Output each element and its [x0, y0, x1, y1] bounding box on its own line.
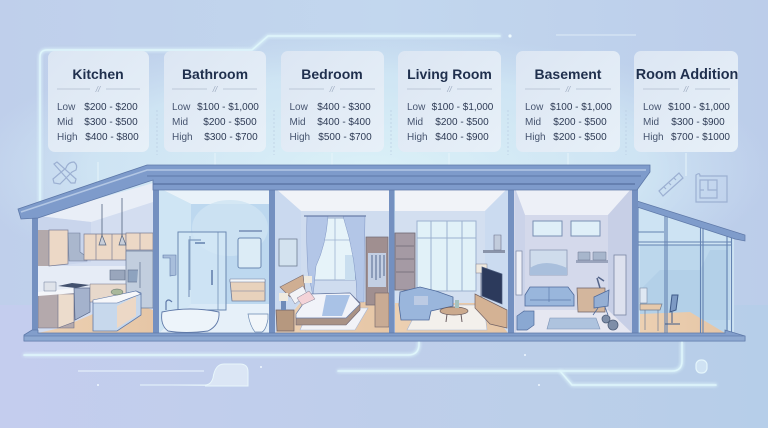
- house cross-section: [18, 165, 745, 341]
- card: Bedroom: $400 - $400: [317, 117, 371, 128]
- card: Basement: [516, 51, 620, 152]
- card: Basement: High: [525, 132, 546, 143]
- card: Bathroom: $100 - $1,000: [197, 102, 259, 113]
- card: Basement: Mid: [525, 117, 541, 128]
- card: Bathroom: //: [212, 85, 218, 94]
- card: Basement: Basement: [535, 66, 602, 82]
- room: basement: [514, 188, 633, 334]
- icon: blueprint: [696, 174, 727, 202]
- card: Bedroom: $400 - $300: [317, 102, 371, 113]
- card: Kitchen: $200 - $200: [84, 102, 138, 113]
- card: Bathroom: Mid: [172, 117, 188, 128]
- card: Living Room: Mid: [407, 117, 423, 128]
- card: Living Room: $400 - $900: [435, 132, 489, 143]
- room: kitchen: [38, 183, 153, 333]
- card: Kitchen: $300 - $500: [84, 117, 138, 128]
- card: Room Addition: Room Addition: [636, 67, 738, 83]
- card: Room Addition: $700 - $1000: [671, 132, 730, 143]
- card: Living Room: Living Room: [407, 66, 492, 82]
- glowing circuit lines: [24, 34, 716, 386]
- card: Kitchen: Low: [57, 102, 76, 113]
- room: bedroom: [275, 188, 389, 334]
- card: Living Room: [398, 51, 501, 152]
- card: Room Addition: High: [643, 132, 664, 143]
- card: Living Room: High: [407, 132, 428, 143]
- kitchen island: [93, 291, 141, 331]
- card: Kitchen: Mid: [57, 117, 73, 128]
- card: Kitchen: High: [57, 132, 78, 143]
- card: Room Addition: Mid: [643, 117, 659, 128]
- room: living room: [395, 188, 508, 334]
- card: Room Addition: $300 - $900: [671, 117, 725, 128]
- icon: crossed tools: [53, 162, 77, 184]
- card: Basement: $200 - $500: [553, 117, 607, 128]
- card: Bathroom: $200 - $500: [203, 117, 257, 128]
- card: Room Addition: Low: [643, 102, 662, 113]
- floor slab: [24, 330, 745, 341]
- card: Basement: //: [565, 85, 571, 94]
- roof: [18, 165, 650, 219]
- card: Living Room: $200 - $500: [435, 117, 489, 128]
- card: Bedroom: Low: [290, 102, 309, 113]
- card: Living Room: Low: [407, 102, 426, 113]
- card: Room Addition: //: [683, 85, 689, 94]
- card: Bathroom: $300 - $700: [204, 132, 258, 143]
- card: Basement: $100 - $1,000: [550, 102, 612, 113]
- room: bathroom: [159, 188, 269, 334]
- card: Kitchen: $400 - $800: [85, 132, 139, 143]
- card: Basement: Low: [525, 102, 544, 113]
- card: Kitchen: [48, 51, 149, 152]
- card: Bathroom: High: [172, 132, 193, 143]
- card: Kitchen: Kitchen: [72, 66, 124, 82]
- card: Bathroom: [164, 51, 266, 152]
- card: Bedroom: $500 - $700: [318, 132, 372, 143]
- card: Bedroom: [281, 51, 384, 152]
- walls and posts: [32, 180, 638, 334]
- card: Bathroom: Bathroom: [182, 66, 248, 82]
- icon: ruler: [659, 173, 683, 196]
- card: Bedroom: Mid: [290, 117, 306, 128]
- card: Kitchen: //: [95, 85, 101, 94]
- card: Basement: $200 - $500: [553, 132, 607, 143]
- card: Living Room: $100 - $1,000: [432, 102, 494, 113]
- card: Bathroom: Low: [172, 102, 191, 113]
- card: Bedroom: //: [329, 85, 335, 94]
- card: Bedroom: Bedroom: [301, 66, 363, 82]
- card: Bedroom: High: [290, 132, 310, 143]
- card: Room Addition: $100 - $1,000: [668, 102, 730, 113]
- room addition sunroom: [637, 201, 745, 333]
- card: Living Room: //: [446, 85, 452, 94]
- card: Room Addition: [634, 51, 738, 152]
